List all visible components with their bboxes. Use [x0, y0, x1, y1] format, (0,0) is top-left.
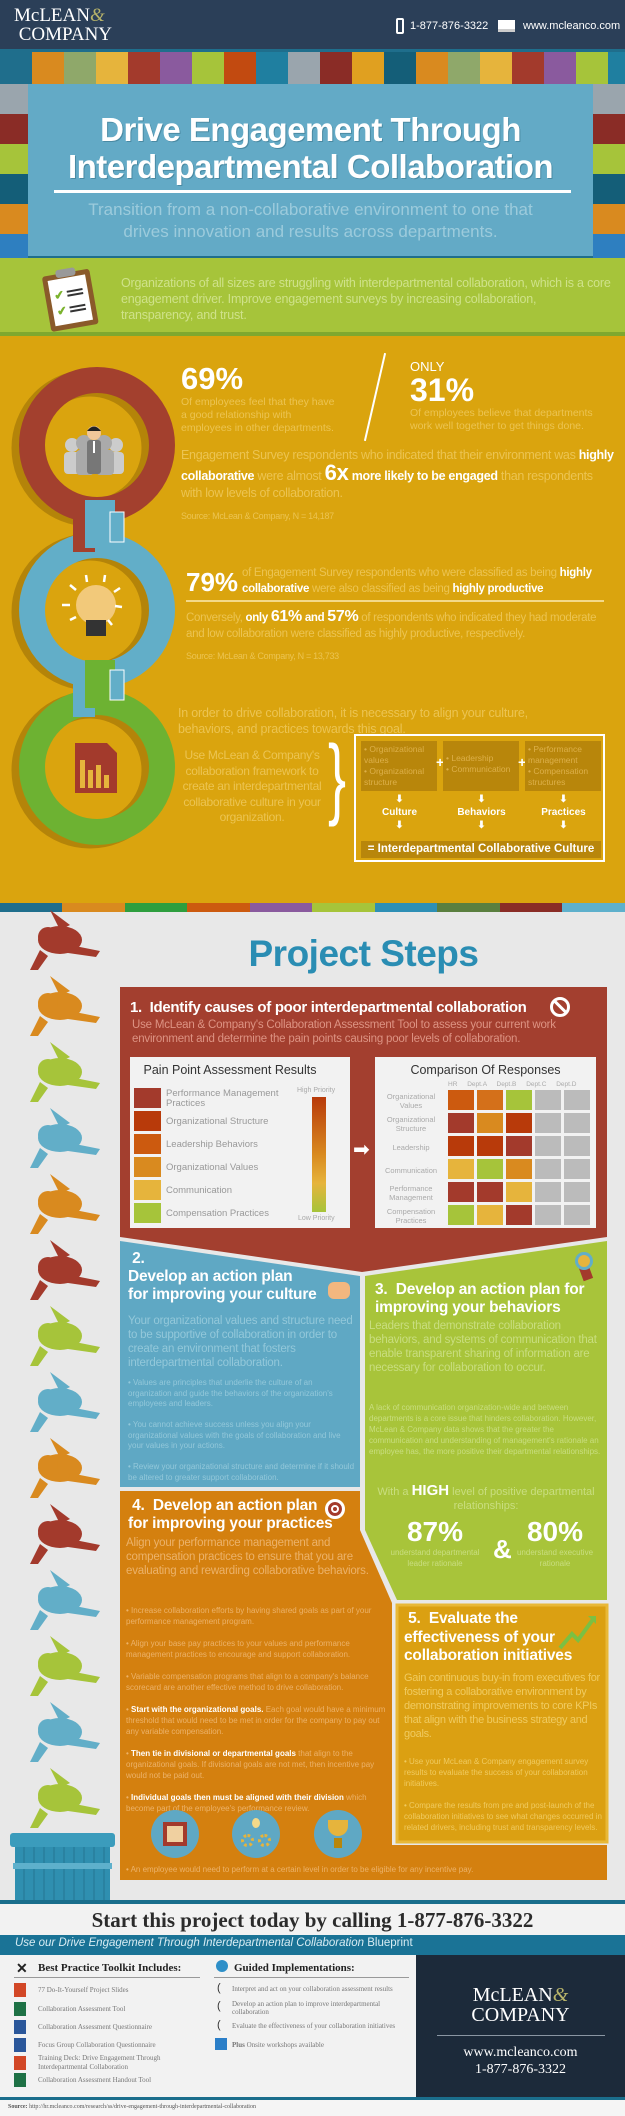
- framework diagram: Practices: [541, 807, 586, 818]
- framework diagram: ⬇: [395, 794, 404, 805]
- ampersand: &: [493, 1534, 512, 1564]
- guided implementations: [214, 1960, 409, 2050]
- stat: 69%: 69%: [181, 361, 243, 396]
- icon: award ribbon: [575, 1252, 593, 1282]
- chart: comparison of responses: Organizational: [387, 1092, 435, 1101]
- icon: light bulb: [62, 575, 122, 636]
- ring: blue: [25, 545, 162, 677]
- chart: pain point assessment: Organizational Structure: [166, 1116, 268, 1127]
- icon: hands circle: [151, 1810, 199, 1858]
- stat: 87%: understand departmental leader rationale: [391, 1548, 479, 1568]
- step 5 heading: effectiveness of your: [404, 1628, 555, 1646]
- title: Drive Engagement Through: [100, 111, 521, 148]
- step 4 bullets: • Then tie in divisional or departmental goals that align to the organizational goals. If divisional goals are not met, then incentive pay would not be paid out.: [126, 1749, 374, 1780]
- icon: gears circle: [232, 1810, 280, 1858]
- panel: step 5: [404, 1610, 602, 1832]
- blueprint bar: Use our Drive Engagement Through Interdepartmental Collaboration Blueprint: [15, 1937, 413, 1949]
- icon: clipboard: [42, 268, 98, 332]
- step 2 bullets: • Review your organizational structure and determine if it should be altered to greater support collaboration.: [128, 1462, 354, 1482]
- step 2 body: Your organizational values and structure need to be supportive of collaboration in order to create an environment that fosters interdepartmental collaboration.: [128, 1315, 353, 1369]
- chart: pain point assessment: Compensation Practices: [166, 1208, 269, 1219]
- step 1 heading: 1. Identify causes of poor interdepartmental collaboration: [130, 999, 527, 1016]
- icon: no sign: [550, 997, 570, 1017]
- conversely text: [186, 608, 596, 661]
- header logo: [14, 5, 112, 45]
- step 5 heading: 5. Evaluate the: [408, 1610, 518, 1627]
- framework diagram: ⬇: [559, 820, 568, 831]
- chart: comparison of responses: Organizational: [387, 1115, 435, 1124]
- color stripe: [0, 903, 625, 912]
- framework diagram: • Leadership: [446, 753, 493, 763]
- source: Source: http://hr.mcleanco.com/research/ss/drive-engagement-through-interdepartmental-collaboration: [8, 2104, 256, 2110]
- intro text: Organizations of all sizes are struggling with interdepartmental collaboration, which is a core engagement driver. Improve engagement surveys by increasing collaboration, transparency, and trust.: [121, 276, 611, 322]
- step 5 heading: collaboration initiatives: [404, 1647, 572, 1664]
- chart: comparison of responses: Structure: [396, 1124, 426, 1133]
- stat: 31%: ONLY: [410, 359, 444, 374]
- subtitle: [88, 200, 533, 241]
- green intro band: [0, 258, 625, 336]
- footer logo and contact: [437, 1984, 605, 2077]
- stat: 69%: Of employees feel that they have a good relationship with employees in other departments.: [181, 396, 335, 434]
- text: of Engagement Survey respondents who were classified as being highly collaborative were also classified as being highly productive: [242, 567, 592, 595]
- footer logo and contact: McLEAN&: [473, 1984, 568, 2006]
- chart: pain point assessment: High Priority: [297, 1087, 335, 1094]
- framework description: Use McLean & Company's collaboration framework to create an interdepartmental collaborative culture in your organization.: [183, 748, 321, 824]
- toolkit list: Collaboration Assessment Tool: [38, 2005, 125, 2013]
- chart: pain point assessment: Organizational Values: [166, 1162, 258, 1173]
- guided implementations: (: [217, 2019, 221, 2031]
- step 3 detail: A lack of communication organization-wide and between departments is a core issue that hinders collaboration. However, McLean & Company data shows that the greater the communication and understanding of management's rationale an employee has, the more positive their departmental relationships.: [369, 1403, 600, 1456]
- icon: report document: [75, 743, 117, 793]
- step 2 bullets: • You cannot achieve success unless you align your organizational values with the goals of collaboration and live your values in your actions.: [128, 1420, 341, 1450]
- chart: comparison of responses: Practices: [396, 1216, 426, 1225]
- step 2 heading: Develop an action plan: [128, 1268, 292, 1285]
- header contact: www.mcleanco.com: [523, 20, 620, 32]
- step 4 body: Align your performance management and compensation practices to ensure that you are evaluating and rewarding collaborative behaviors.: [126, 1537, 369, 1577]
- stat: 87%: [391, 1516, 479, 1568]
- icon: clipboard: ✔: [53, 287, 65, 303]
- icon: phone: [396, 18, 404, 34]
- subtitle: drives innovation and results across departments.: [123, 222, 498, 241]
- subtitle: Transition from a non-collaborative environment to one that: [88, 200, 533, 219]
- text: 79%: [186, 567, 238, 597]
- toolkit list: Collaboration Assessment Questionnaire: [38, 2023, 152, 2031]
- barrel: [10, 1833, 115, 1900]
- conversely text: Conversely, only 61% and 57% of respondents who indicated they had moderate and low collaboration were classified as highly productive, respectively.: [186, 608, 596, 640]
- chart: pain point assessment: Pain Point Assessment Results: [144, 1063, 316, 1077]
- divider slash: [364, 353, 386, 441]
- icon: tools: ✕: [16, 1960, 28, 1976]
- title: Interdepartmental Collaboration: [68, 148, 553, 185]
- step 5 body: Gain continuous buy-in from executives for fostering a collaborative environment by demonstrating improvements to core KPIs that align with the business strategy and goals.: [404, 1672, 600, 1740]
- framework diagram: Culture: [382, 807, 417, 818]
- stat: 69%: [181, 361, 335, 434]
- step 4 bullets: • Variable compensation programs that align to a company's balance scorecard are another effective method to drive collaboration.: [126, 1672, 369, 1692]
- engagement 6x text: Engagement Survey respondents who indicated that their environment was highly collaborative were almost 6x more likely to be engaged than respondents with low levels of collaboration.: [181, 448, 614, 500]
- chart: comparison of responses: Values: [400, 1101, 422, 1110]
- guided implementations: (: [217, 1982, 221, 1994]
- footer backgrounds: [0, 1900, 625, 2116]
- header bar: [0, 0, 625, 49]
- step 3 heading: improving your behaviors: [375, 1299, 561, 1316]
- chart: pain point assessment: [130, 1057, 350, 1228]
- icon: chat bubble: [216, 1960, 228, 1972]
- stat: 80%: understand executive rationale: [517, 1548, 593, 1568]
- framework diagram: • Compensation structures: [528, 766, 588, 787]
- framework diagram: ⬇: [477, 820, 486, 831]
- monkey chain: [30, 910, 100, 1828]
- panel: step 4: [126, 1497, 473, 1874]
- stat: 80%: [517, 1516, 593, 1568]
- arrow: ➡: [353, 1139, 370, 1161]
- stat: 31%: Of employees believe that departments work well together to get things done.: [410, 407, 593, 432]
- step 2 heading: for improving your culture: [128, 1286, 317, 1303]
- icon: monitor: [498, 20, 515, 32]
- guided implementations: (: [217, 2000, 221, 2012]
- step 2 bullets: [128, 1378, 354, 1482]
- step 5 bullets: • Use your McLean & Company engagement survey results to evaluate the success of your collaboration initiatives.: [404, 1757, 588, 1788]
- step 4 heading: for improving your practices: [128, 1515, 333, 1532]
- icon: growth arrow: [558, 1616, 596, 1650]
- step 1 description: Use McLean & Company's Collaboration Assessment Tool to assess your current work environment and determine the pain points causing poor levels of collaboration.: [132, 1019, 556, 1045]
- panel: step 3: [369, 1252, 600, 1568]
- stat: 31%: [410, 359, 593, 432]
- guided implementations: Guided Implementations:: [234, 1962, 355, 1974]
- step 5 bullets: • Compare the results from pre and post-launch of the collaboration initiatives to see what changes occurred in related drivers, including trust and transparency levels.: [404, 1801, 602, 1832]
- header logo: McLEAN&: [14, 5, 105, 26]
- step 2 bullets: • Values are principles that underlie the culture of an organization and guide the behaviors of the organization's employees and leaders.: [128, 1378, 333, 1408]
- stat: 80%: 80%: [527, 1516, 583, 1547]
- footer logo and contact: COMPANY: [471, 2004, 570, 2026]
- guided implementations: Develop an action plan to improve interdepartmental collaboration: [232, 2000, 380, 2016]
- step 3 body: Leaders that demonstrate collaboration behaviors, and systems of communication that enable transparent sharing of information are necessary for collaboration to occur.: [369, 1320, 597, 1374]
- framework diagram: +: [518, 754, 526, 770]
- step 4 bullets: • Start with the organizational goals. Each goal would have a minimum threshold that would need to be met in order for the company to pay out any variable compensation.: [126, 1705, 385, 1736]
- icon: trophy circle: [314, 1810, 362, 1858]
- toolkit list: Best Practice Toolkit Includes:: [38, 1962, 181, 1974]
- ring: red: [25, 380, 162, 513]
- framework diagram: • Communication: [446, 764, 510, 774]
- toolkit list: [14, 1960, 200, 2087]
- step panels: [120, 987, 607, 1880]
- step 4 bullets: • Increase collaboration efforts by having shared goals as part of your performance management program.: [126, 1606, 371, 1626]
- conversely text: Source: McLean & Company, N = 13,733: [186, 651, 339, 661]
- guided implementations: Plus Onsite workshops available: [232, 2041, 324, 2049]
- final bullet: • An employee would need to perform at a certain level in order to be eligible for any incentive pay.: [126, 1865, 473, 1874]
- footer logo and contact: www.mcleanco.com: [463, 2045, 578, 2060]
- framework diagram: • Performance management: [528, 744, 582, 765]
- rings illustration: [12, 367, 175, 848]
- guided implementations: Evaluate the effectiveness of your collaboration initiatives: [232, 2022, 395, 2030]
- header logo: COMPANY: [19, 24, 112, 45]
- stat: 31%: 31%: [410, 372, 474, 408]
- step 2 heading: [128, 1250, 317, 1303]
- framework diagram: ⬇: [477, 794, 486, 805]
- panel: step 1: [130, 997, 596, 1228]
- framework diagram: ⬇: [559, 794, 568, 805]
- framework diagram: = Interdepartmental Collaborative Culture: [368, 843, 594, 855]
- step 4 bullets: • Individual goals then must be aligned with their division which become part of the employee's performance review.: [126, 1793, 367, 1813]
- chart: comparison of responses: Communication: [385, 1166, 437, 1175]
- stat: 87%: 87%: [407, 1516, 463, 1547]
- icon: clipboard: ✔: [56, 303, 68, 319]
- header contact: 1-877-876-3322: [410, 20, 488, 32]
- chart: comparison of responses: Compensation: [387, 1207, 435, 1216]
- icon: target: [325, 1499, 345, 1519]
- framework diagram: +: [436, 754, 444, 770]
- framework diagram: [354, 734, 605, 862]
- chart: comparison of responses: HR Dept.A Dept.B Dept.C Dept.D: [448, 1081, 576, 1088]
- engagement 6x text: Source: McLean & Company, N = 14,187: [181, 511, 334, 521]
- framework diagram: • Organizational structure: [364, 766, 424, 787]
- panel: step 2: [128, 1250, 354, 1482]
- chart: comparison of responses: Management: [389, 1193, 433, 1202]
- puzzle band: [0, 49, 625, 258]
- step 4 heading: [128, 1497, 333, 1532]
- ring: green: [25, 702, 162, 835]
- brace: }: [328, 728, 346, 828]
- step 3 heading: 3. Develop an action plan for: [375, 1281, 584, 1298]
- title: [68, 111, 553, 186]
- chart: pain point assessment: Low Priority: [298, 1215, 335, 1222]
- chart: comparison of responses: Leadership: [392, 1143, 430, 1152]
- step 5 bullets: [404, 1757, 602, 1832]
- chart: comparison of responses: [375, 1057, 596, 1228]
- framework diagram: • Organizational values: [364, 744, 424, 765]
- header contact: [396, 18, 620, 34]
- step 5 heading: [404, 1610, 572, 1664]
- framework diagram: Behaviors: [457, 807, 506, 818]
- step 4 bullets: • Align your base pay practices to your values and performance management practices to encourage and support collaboration.: [126, 1639, 350, 1659]
- toolkit list: 77 Do-It-Yourself Project Slides: [38, 1986, 128, 1994]
- footer logo and contact: 1-877-876-3322: [475, 2062, 566, 2077]
- icon: people: [64, 426, 124, 475]
- chart: pain point assessment: Communication: [166, 1185, 232, 1196]
- chart: pain point assessment: Performance Management Practices: [166, 1088, 278, 1109]
- framework diagram: ⬇: [395, 820, 404, 831]
- section heading: Project Steps: Project Steps: [248, 933, 478, 974]
- toolkit list: Training Deck: Drive Engagement Through: [38, 2054, 160, 2062]
- toolkit list: Focus Group Collaboration Questionnaire: [38, 2041, 156, 2049]
- step 2 heading: 2.: [132, 1250, 145, 1267]
- step 4 heading: 4. Develop an action plan: [132, 1497, 317, 1514]
- high level text: With a HIGH level of positive departmental relationships:: [377, 1482, 595, 1512]
- framework intro: In order to drive collaboration, it is necessary to align your culture, behaviors, and practices towards this goal.: [178, 706, 528, 736]
- toolkit list: Interdepartmental Collaboration: [38, 2063, 128, 2071]
- gold stats section: [0, 336, 625, 903]
- step 4 bullets: [126, 1606, 385, 1813]
- call to action: Start this project today by calling 1-877-876-3322: [92, 1908, 533, 1932]
- toolkit list: Collaboration Assessment Handout Tool: [38, 2076, 151, 2084]
- chart: pain point assessment: Leadership Behaviors: [166, 1139, 258, 1150]
- icon: thumbs up: [328, 1282, 350, 1299]
- stat: 79%: [186, 567, 592, 597]
- hands: [73, 500, 124, 717]
- step 3 heading: [375, 1281, 584, 1316]
- chart: comparison of responses: Comparison Of Responses: [410, 1063, 561, 1077]
- chart: comparison of responses: Performance: [390, 1184, 432, 1193]
- guided implementations: Interpret and act on your collaboration assessment results: [232, 1985, 393, 1993]
